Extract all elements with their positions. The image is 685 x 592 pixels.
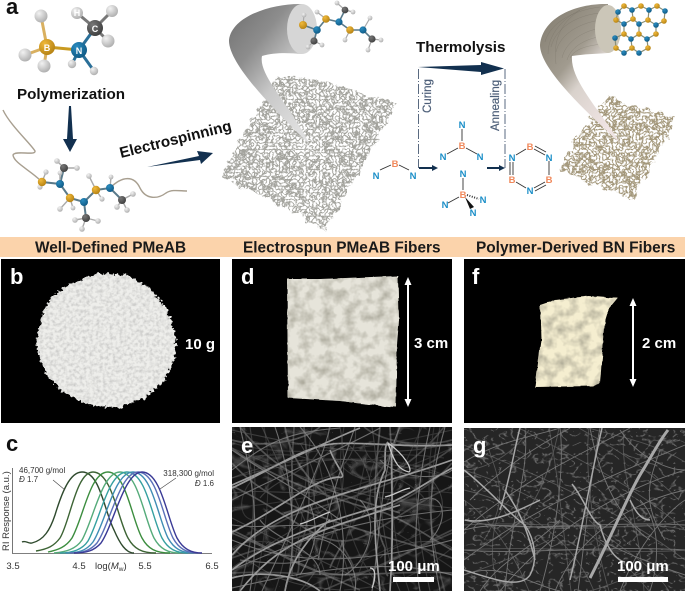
label c: c — [6, 431, 18, 456]
annotation: low molecular weight: Đ 1.7 — [19, 475, 39, 484]
chemical structure: linear B-N: N — [410, 171, 417, 182]
chemical structure: tetracoordinate boron: N — [480, 195, 487, 206]
heading: Well-Defined PMeAB: Well-Defined PMeAB — [35, 240, 186, 256]
arrow: thermolysis — [418, 62, 504, 75]
molecule: monomer with B, N, C, H atoms — [18, 5, 118, 75]
fiber mat: electrospun polymer — [220, 75, 397, 230]
chemical structure: linear B-N: B — [392, 159, 399, 170]
annotation: high molecular weight: 318,300 g/mol — [163, 469, 214, 478]
chemical structure: tricoordinate boron — [440, 120, 484, 163]
axes — [12, 468, 212, 554]
heading: Electrospun PMeAB Fibers: Electrospun PMeAB Fibers — [243, 240, 441, 256]
arrow: polymerization down — [63, 106, 77, 152]
panel d: electrospun sheet photo — [232, 259, 452, 423]
scale bar g: 100 μm — [617, 558, 669, 575]
chemical structure: borazine ring: N — [546, 153, 553, 164]
chemical structure: tricoordinate boron: N — [459, 120, 466, 131]
x-axis tick labels: 3.5 — [6, 561, 20, 572]
horn: spinning jet, grey — [229, 4, 317, 145]
lattice: hexagonal boron nitride — [612, 3, 668, 56]
chemical structure: borazine ring: B — [509, 175, 516, 186]
x-axis title: log(M — [95, 561, 119, 572]
x-axis tick labels: 5.5 — [138, 561, 152, 572]
arrow: electrospinning — [147, 151, 213, 167]
dash-dot guide lines — [418, 69, 505, 168]
annotation: high molecular weight — [160, 469, 215, 489]
molecule: monomer with B, N, C, H atoms: B — [44, 43, 51, 53]
label e: e — [241, 433, 253, 458]
arrow: annealing step — [487, 165, 505, 171]
annotation: low molecular weight — [19, 466, 65, 490]
heading: Thermolysis: Thermolysis — [416, 39, 505, 56]
label g: g — [473, 433, 486, 458]
panel a: synthesis scheme — [3, 0, 677, 232]
y-axis title: RI Response (a.u.) — [1, 471, 12, 551]
polymer chain molecule — [3, 110, 187, 232]
label d: d — [241, 264, 254, 289]
panel g: SEM of BN fibers — [464, 428, 685, 591]
x-axis tick labels: 4.5 — [72, 561, 86, 572]
BN fiber sheet — [535, 296, 618, 387]
scale bar e: 100 μm — [388, 558, 440, 575]
fiber sheet — [287, 276, 399, 407]
label: Curing: Curing — [422, 79, 434, 113]
panel e: SEM of electrospun fibers — [232, 427, 452, 591]
chemical structure: borazine ring: B — [546, 175, 553, 186]
panel f: BN sheet photo — [464, 259, 685, 423]
annotation: low molecular weight: 46,700 g/mol — [19, 466, 65, 475]
chemical structure: borazine ring: N — [509, 153, 516, 164]
powder pile — [36, 273, 176, 408]
size label: 3 cm — [414, 335, 448, 352]
chemical structure: tetracoordinate boron — [442, 169, 487, 219]
chemical structure: tetracoordinate boron: N — [442, 200, 449, 211]
x-axis tick labels — [6, 561, 219, 572]
chemical structure: tricoordinate boron: N — [477, 152, 484, 163]
chemical structure: linear B-N: N — [373, 171, 380, 182]
heading: Polymer-Derived BN Fibers: Polymer-Derived BN Fibers — [476, 240, 675, 256]
size label: 2 cm — [642, 335, 676, 352]
molecule: monomer with B, N, C, H atoms: H — [74, 8, 80, 18]
annotation: high molecular weight: Đ 1.6 — [195, 479, 215, 488]
label f: f — [472, 264, 480, 289]
fiber mat: boron nitride — [560, 97, 677, 200]
chemical structure: tricoordinate boron: B — [459, 141, 466, 152]
label b: b — [10, 264, 23, 289]
arrow: 3 cm scale — [404, 277, 412, 407]
molecule: monomer with B, N, C, H atoms: N — [76, 46, 82, 56]
molecule: monomer with B, N, C, H atoms: C — [92, 24, 99, 34]
x-axis title: w — [118, 566, 124, 573]
header band — [0, 237, 685, 257]
chemical structure: borazine ring — [509, 142, 553, 197]
chemical structure: borazine ring: N — [527, 186, 534, 197]
chemical structure: tetracoordinate boron: N — [470, 208, 477, 219]
panel b: PMeAB powder photo — [1, 259, 220, 423]
label: Annealing: Annealing — [490, 80, 502, 131]
panel c: molecular weight distribution chart — [1, 431, 219, 573]
chemical structure: linear B-N — [373, 159, 417, 182]
heading: Polymerization: Polymerization — [17, 86, 125, 103]
chemical structure: borazine ring: B — [527, 142, 534, 153]
mass label: 10 g — [185, 336, 215, 353]
molecule: polymer chain on jet — [299, 1, 383, 52]
arrow: 2 cm scale — [630, 298, 636, 387]
x-axis tick labels: 6.5 — [205, 561, 219, 572]
arrow: curing step — [419, 165, 438, 171]
chemical structure: tetracoordinate boron: N — [460, 169, 467, 180]
horn: spinning jet, BN — [540, 4, 621, 143]
chemical structure: tricoordinate boron: N — [440, 152, 447, 163]
chemical structure: tetracoordinate boron: B — [460, 190, 467, 201]
heading: Electrospinning: Electrospinning — [118, 118, 233, 162]
traces — [22, 472, 202, 553]
x-axis title: ) — [123, 561, 127, 572]
